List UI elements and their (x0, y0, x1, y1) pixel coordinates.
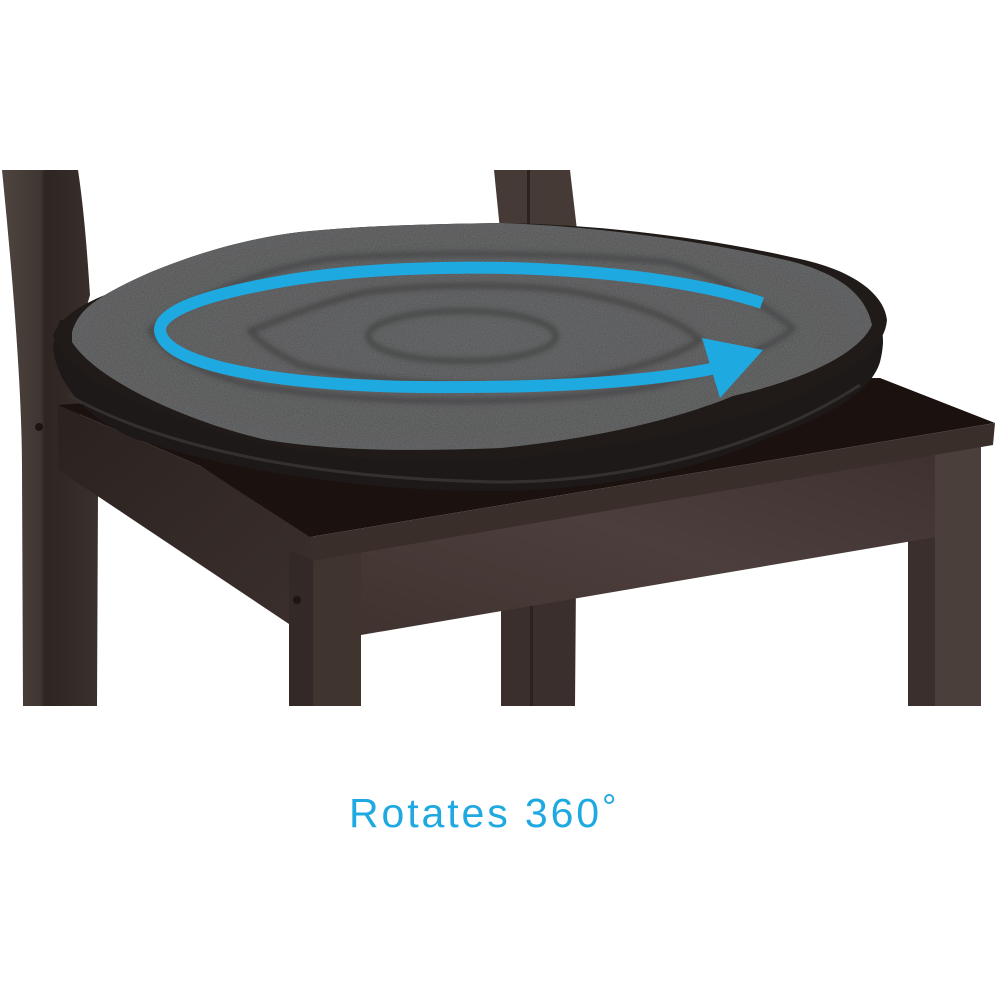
back left post and rear left leg (2, 170, 98, 706)
swivel cushion (53, 223, 887, 491)
back right post (494, 170, 577, 230)
chair illustration (2, 170, 995, 706)
seat top (58, 378, 995, 537)
caption: Rotates 360 (349, 790, 602, 836)
cushion base layer (53, 320, 883, 491)
seat front apron (361, 445, 936, 635)
cushion top (72, 223, 872, 450)
front left post (313, 545, 361, 706)
quilting seams (150, 254, 793, 401)
caption: ° (602, 786, 616, 827)
front right leg front face (935, 435, 981, 706)
front right leg inner face (908, 520, 936, 706)
base seam (68, 385, 860, 482)
screw front (293, 596, 301, 604)
front left leg side face (289, 550, 313, 706)
seat left rail (58, 405, 312, 624)
cushion rim (53, 223, 887, 461)
screw left (35, 423, 43, 431)
rotation arrow (160, 268, 763, 398)
rear right leg (501, 580, 576, 706)
seat front edge (310, 423, 995, 561)
